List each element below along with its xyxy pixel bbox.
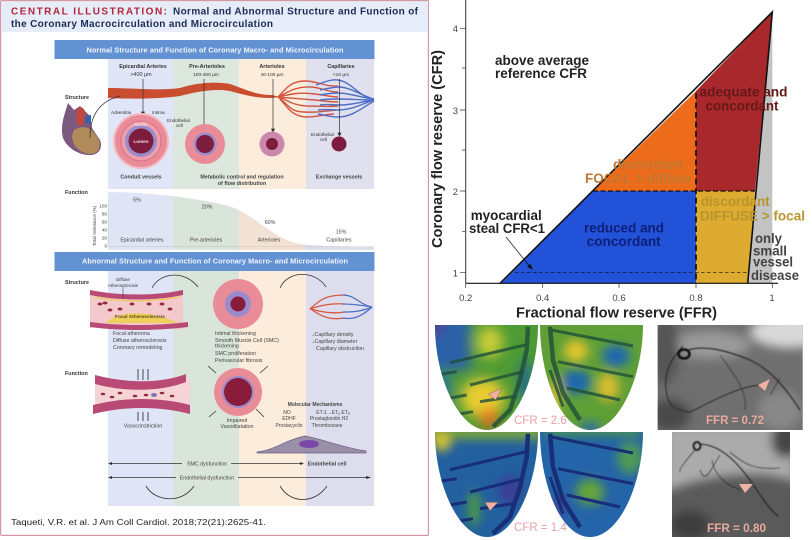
- region labels: disease: [751, 268, 799, 283]
- column headings: 100-400 µm: [193, 72, 219, 78]
- molecular mechanisms: ET-1→ETₐ ETᵦ: [316, 410, 350, 416]
- region labels: only: [755, 231, 782, 246]
- normal heading: [54, 40, 374, 59]
- labels: structure and function: Structure: [65, 280, 89, 286]
- region labels: concordant: [706, 99, 779, 114]
- citation: Taqueti, V.R. et al. J Am Coll Cardiol. 2018;72(21):2625-41.: [11, 517, 266, 527]
- region labels: FOCAL > diffuse: [585, 171, 691, 186]
- text: macro changes: Perivascular fibrosis: [215, 358, 263, 364]
- cross section: arteriole: [260, 132, 284, 156]
- region: discordant focal: [593, 91, 696, 191]
- label: FFR = 0.72: [706, 415, 764, 427]
- column captions: [120, 174, 362, 187]
- region labels: steal CFR<1: [469, 221, 545, 236]
- chart: total resistance function: 40: [102, 228, 107, 232]
- arrow marker: [488, 388, 502, 400]
- arrow head: steal: [527, 264, 533, 270]
- vessel: vasoconstriction: Vasoconstriction: [124, 424, 162, 430]
- tick labels: 0.8: [689, 293, 703, 304]
- chart: total resistance function: 60: [102, 220, 107, 224]
- panel: normal structure and function: [54, 40, 374, 189]
- region labels: discordant: [701, 194, 770, 209]
- cross section: impaired vasodilatation: Vasodilatation: [221, 424, 253, 430]
- molecular mechanisms: Molecular Mechanisms: [288, 402, 343, 408]
- column headings: Arterioles: [259, 64, 285, 70]
- column headings: [119, 64, 355, 78]
- column backgrounds: [108, 271, 374, 506]
- chart: total resistance function: 60%: [265, 220, 276, 226]
- chart: total resistance function: Total resistance (%): [92, 205, 97, 246]
- molecular mechanisms: [276, 402, 350, 429]
- cross section: epicardial artery: Lumen: [133, 139, 149, 144]
- region labels: myocardial: [471, 208, 542, 223]
- region: discordant diffuse: [696, 191, 755, 283]
- chart: total resistance function: Epicardial arteries: [120, 238, 164, 244]
- region labels: adequate and: [700, 85, 788, 100]
- cross section labels: [111, 110, 334, 142]
- vessel: atherosclerosis: Focal Atherosclerosis: [115, 314, 165, 320]
- panel: central illustration: [0, 0, 428, 536]
- label: CFR = 2.6: [514, 415, 567, 427]
- region: small vessel disease: [748, 12, 772, 283]
- column headings: 40-100 µm: [260, 72, 284, 78]
- cross section labels: Adventitia: [111, 110, 132, 115]
- text: macro changes: Smooth Muscle Cell (SMC): [215, 338, 279, 344]
- normal heading: Normal Structure and Function of Coronary Macro- and Microcirculation: [86, 46, 344, 54]
- cross section: thickened wall: [213, 279, 263, 329]
- chart: total resistance function: 80: [102, 212, 107, 216]
- region labels: vessel: [753, 255, 793, 270]
- column headings: Epicardial Arteries: [119, 64, 167, 70]
- veins: [550, 434, 633, 527]
- chart: total resistance function: Function: [65, 190, 88, 196]
- angiogram: FFR 0.80: [672, 432, 790, 537]
- chart: total resistance function: 20: [102, 236, 107, 240]
- text: macro changes: [113, 331, 364, 364]
- text: macro changes: Intimal thickening: [215, 331, 256, 337]
- cross section labels: Intima: [152, 110, 165, 115]
- tick labels: 0.2: [459, 293, 472, 304]
- title banner: CENTRAL ILLUSTRATION:: [11, 6, 167, 18]
- region labels: reference CFR: [495, 66, 587, 81]
- vessel: vasoconstriction: [93, 369, 190, 430]
- veins: [435, 327, 528, 427]
- arrows into vessel cross sections: [142, 79, 341, 136]
- column headings: Capillaries: [327, 64, 355, 70]
- text: macro changes: thickening: [215, 344, 239, 350]
- column captions: Exchange vessels: [316, 174, 362, 180]
- tick labels: 0.6: [612, 293, 626, 304]
- cross section: epicardial artery: [114, 114, 168, 168]
- region labels: [469, 53, 805, 283]
- text: macro changes: SMC proliferation: [215, 351, 256, 357]
- cross section labels: Endothelial: [311, 132, 334, 137]
- region: adequate and concordant: [696, 12, 772, 191]
- text: macro changes: ↓Capillary density: [312, 332, 354, 338]
- column headings: <10 µm: [333, 72, 349, 78]
- heatmap: CFR 2.6: [435, 325, 643, 430]
- label: structure: Structure: [65, 95, 89, 101]
- text: macro changes: Diffuse atherosclerosis: [113, 338, 167, 344]
- molecular mechanisms: EDHF: [282, 416, 296, 422]
- region: reduced and concordant: [502, 191, 696, 283]
- chart: total resistance function: Capillaries: [326, 238, 352, 244]
- column captions: Conduit vessels: [120, 174, 162, 180]
- chart: total resistance function: 100: [99, 204, 107, 208]
- tick labels: [453, 24, 775, 304]
- capillary rarefaction: [310, 295, 372, 319]
- label: FFR = 0.80: [707, 523, 766, 535]
- molecular mechanisms: NO: [283, 410, 291, 416]
- region labels: small: [753, 244, 787, 259]
- arrow marker: [739, 484, 753, 493]
- vessel: artery to capillary: [108, 80, 374, 117]
- text: macro changes: ↓Capillary diameter: [312, 339, 358, 345]
- veins: [435, 434, 528, 534]
- curved arrows top: [152, 274, 326, 288]
- chart: total resistance function: Pre-arterioles: [190, 238, 222, 244]
- tick labels: 3: [453, 106, 458, 117]
- vessel: atherosclerosis: [90, 277, 188, 330]
- tick labels: 0.4: [536, 293, 549, 304]
- arrow marker: [758, 379, 770, 391]
- chart: total resistance function: [65, 190, 374, 250]
- cross section labels: cell: [320, 137, 327, 142]
- veins: [550, 327, 633, 420]
- text: macro changes: Coronary remodeling: [113, 345, 163, 351]
- label: CFR = 1.4: [514, 522, 567, 534]
- tick labels: 1: [453, 268, 458, 280]
- title banner: [1, 2, 428, 32]
- cross section labels: Endothelial: [167, 118, 190, 123]
- region labels: concordant: [587, 234, 661, 249]
- cross section: pre-arteriole: [185, 124, 225, 164]
- text: macro changes: Capillary obstruction: [316, 346, 364, 352]
- icon: heart: [62, 96, 120, 155]
- column captions: of flow distribution: [218, 181, 266, 187]
- vessel: atherosclerosis: Diffuse: [116, 277, 130, 282]
- tick labels: 4: [453, 24, 458, 35]
- column headings: Pre-Arterioles: [189, 64, 225, 70]
- angiogram: FFR 0.72: [658, 325, 803, 430]
- chart: total resistance function: Arterioles: [258, 238, 281, 244]
- axis title: y: Coronary flow reserve (CFR): [430, 50, 446, 248]
- text: macro changes: Focal atheroma: [113, 331, 150, 337]
- cross section labels: cell: [176, 123, 183, 128]
- cross section: epicardial artery: Media: [134, 122, 148, 127]
- chart: total resistance function: 5%: [133, 198, 141, 204]
- chart: total resistance function: 20%: [202, 204, 213, 210]
- vessel: atherosclerosis: Atherosclerosis: [108, 283, 139, 288]
- region labels: reduced and: [584, 221, 664, 236]
- labels: structure and function: Function: [65, 371, 88, 377]
- title banner: Normal and Abnormal Structure and Function of: [173, 6, 419, 18]
- column captions: Metabolic control and regulation: [200, 174, 284, 180]
- dysfunction arrows: Endothelial dysfunction: [180, 476, 234, 482]
- cross section: impaired vasodilatation: [208, 366, 268, 430]
- heatmap: CFR 1.4: [435, 432, 643, 537]
- region labels: discordant: [613, 157, 684, 172]
- chart: FFR vs CFR: [430, 0, 805, 322]
- molecular mechanisms: Prostacyclin: [276, 423, 303, 429]
- tick labels: 1: [769, 293, 775, 304]
- curved arrows bottom: [146, 486, 327, 500]
- molecular mechanisms: Prostaglandin H2: [310, 416, 348, 422]
- icon: endothelial cell: [257, 436, 366, 453]
- title banner: the Coronary Macrocirculation and Microcirculation: [11, 19, 273, 30]
- tick labels: 2: [453, 187, 458, 198]
- dysfunction arrows: SMC dysfunction: [187, 462, 227, 468]
- abnormal heading: [54, 252, 374, 271]
- molecular mechanisms: Thromboxane: [312, 423, 343, 429]
- cross section: capillary: [332, 136, 346, 152]
- dysfunction arrows: Endothelial cell: [308, 462, 347, 468]
- arrow marker: [485, 502, 498, 511]
- abnormal heading: Abnormal Structure and Function of Coronary Macro- and Microcirculation: [82, 256, 348, 266]
- region labels: above average: [495, 53, 589, 68]
- axis title: x: Fractional flow reserve (FFR): [516, 306, 717, 322]
- axes and outline: [460, 0, 778, 288]
- cross section: impaired vasodilatation: Impaired: [227, 418, 247, 424]
- column headings: >400 µm: [130, 72, 152, 78]
- region labels: DIFFUSE > focal: [700, 209, 805, 224]
- labels: structure and function: [65, 280, 89, 377]
- chart: total resistance function: 0: [104, 244, 107, 248]
- chart: total resistance function: 15%: [336, 230, 347, 236]
- panel: abnormal structure and function: [54, 252, 374, 506]
- dysfunction arrows: [108, 462, 371, 482]
- column backgrounds: [108, 59, 374, 189]
